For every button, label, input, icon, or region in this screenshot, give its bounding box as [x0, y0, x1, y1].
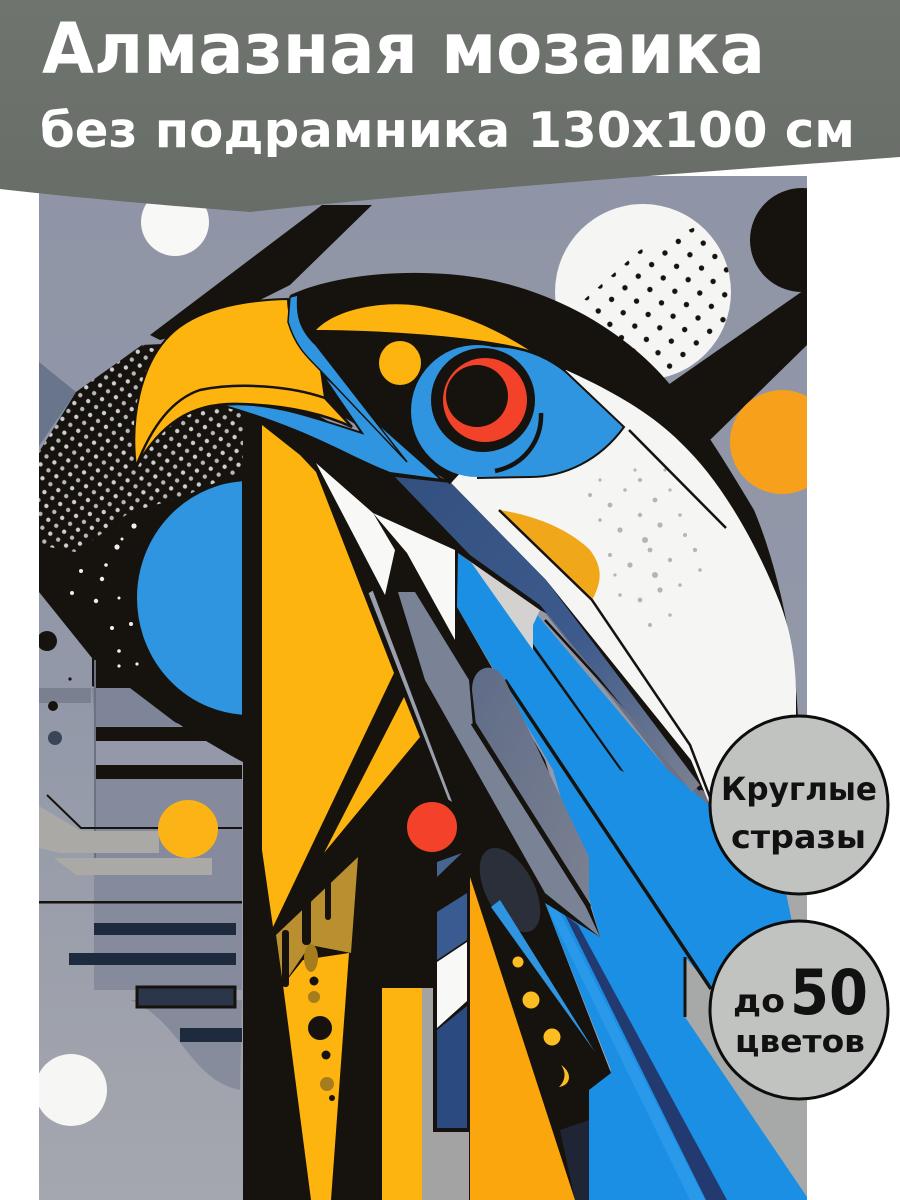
pill panel — [472, 668, 589, 907]
white body — [451, 370, 796, 810]
badge: up to 50 colours: цветов — [735, 1024, 865, 1060]
title line 2: без подрамника 130х100 см — [40, 102, 855, 159]
orange triangle — [470, 877, 575, 1200]
yellow beak — [134, 299, 325, 467]
blue circle left — [137, 481, 242, 715]
dark shadow band — [467, 838, 553, 942]
dots on lower yellow column — [308, 976, 335, 1101]
yellow circle left — [158, 800, 218, 858]
gray pane lower right — [685, 957, 807, 1197]
black line between panels — [473, 723, 589, 907]
thin spike on blue — [468, 558, 624, 772]
yellow throat — [499, 510, 600, 600]
slate wedge left — [39, 362, 76, 446]
white throat triangles — [316, 463, 455, 640]
badge: up to 50 colours: до — [733, 982, 785, 1020]
black circle top right — [750, 188, 807, 292]
background mottling — [130, 1000, 242, 1090]
left gray stripes and circles — [37, 631, 242, 1042]
darker panel behind left stripes — [94, 723, 242, 990]
red circle — [406, 801, 458, 853]
black diagonal bar left — [150, 205, 372, 340]
white circle top left — [141, 204, 209, 256]
black diagonal bar right — [668, 288, 807, 440]
header banner — [0, 0, 900, 212]
large dotted white circle — [555, 204, 731, 378]
navy neck strip — [395, 477, 700, 792]
blue sliver near dots — [491, 900, 595, 1052]
yellow brow — [316, 304, 529, 350]
blue sliver — [288, 295, 407, 462]
dark speckled mass — [39, 340, 243, 762]
yellow small circle — [379, 341, 421, 385]
star dots — [70, 523, 139, 668]
navy bottom stripe — [565, 915, 727, 1200]
orange circle right — [730, 390, 807, 494]
blue feathers — [457, 553, 807, 1200]
gray mottled panel — [398, 592, 600, 937]
halftone dots — [39, 340, 245, 560]
small yellow wedge — [324, 697, 420, 853]
blue left face — [221, 373, 442, 480]
big yellow triangle — [262, 425, 394, 927]
tan drip — [304, 944, 318, 972]
badge: round rhinestones: стразы — [731, 818, 866, 856]
striped column — [433, 845, 470, 1132]
black drips — [282, 870, 331, 987]
gray stripes beside blue — [545, 612, 709, 804]
yellow dots on black — [512, 956, 569, 1087]
white circle bottom left — [35, 1054, 107, 1126]
badge: round rhinestones — [710, 716, 888, 894]
blue eye patch — [411, 345, 624, 478]
head black band — [290, 273, 798, 800]
beak lower strip — [136, 386, 352, 467]
gray speckles on body — [588, 468, 702, 627]
gray pane between badges — [786, 894, 807, 920]
badge: round rhinestones: Круглые — [721, 770, 877, 808]
painting: abstract falcon — [35, 176, 854, 1200]
yellow rectangle — [382, 988, 422, 1200]
yellow lower column — [283, 953, 349, 1200]
central black mass — [243, 405, 611, 1200]
badge: up to 50 colours — [710, 921, 888, 1099]
dark base at lower black band — [560, 1120, 589, 1200]
dark tan drip area — [276, 857, 358, 985]
gray rectangle — [422, 988, 469, 1200]
eye — [431, 348, 541, 471]
gray thin strip — [368, 590, 453, 803]
badge: up to 50 colours: 50 — [790, 956, 868, 1029]
black feather line — [505, 680, 711, 989]
body feather outline — [499, 510, 711, 800]
black stripe — [318, 345, 451, 483]
thin line on body — [629, 430, 726, 528]
title line 1: Алмазная мозаика — [42, 8, 765, 90]
